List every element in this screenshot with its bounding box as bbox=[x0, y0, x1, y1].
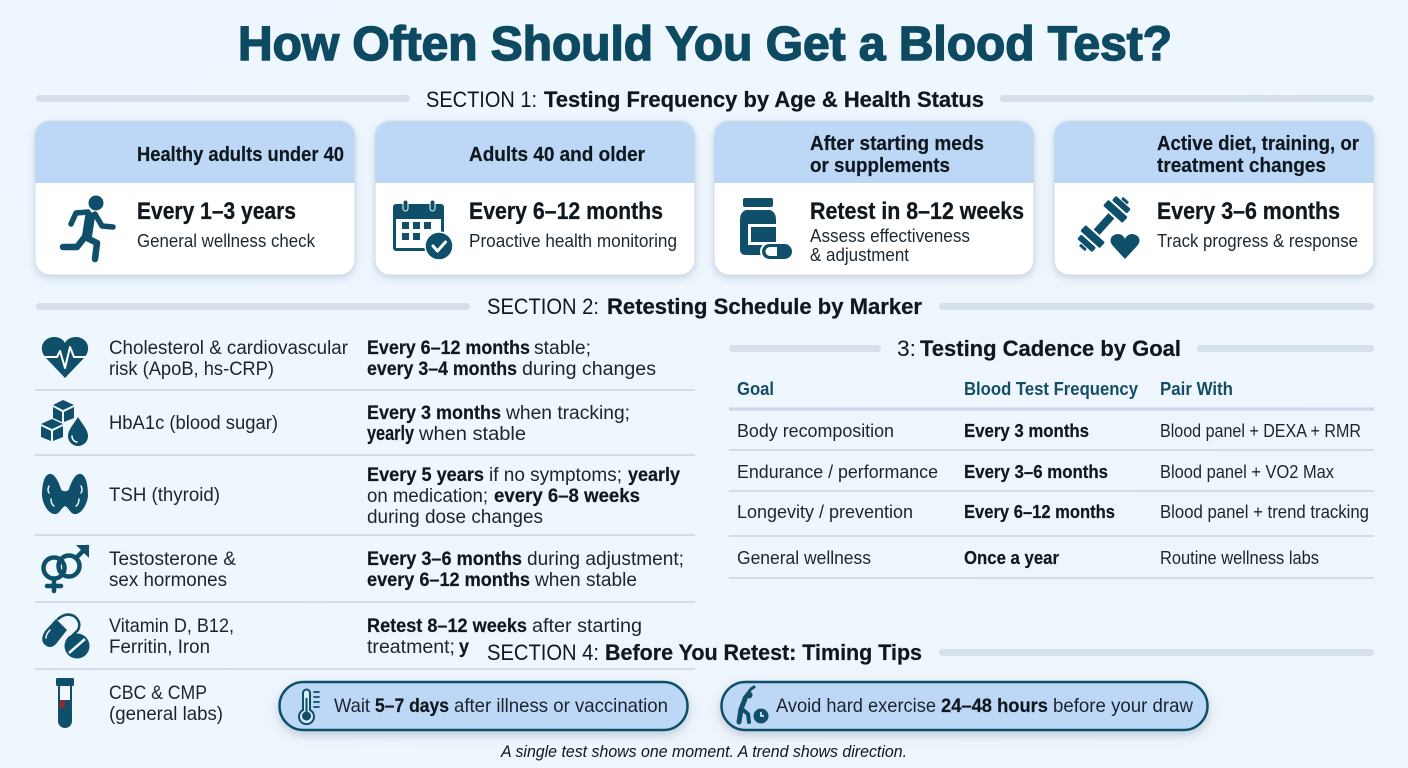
row: HbA1c: yearly bbox=[367, 422, 414, 445]
icon: gender symbols bbox=[44, 545, 89, 591]
row: testosterone: Testosterone & bbox=[109, 549, 236, 570]
table: testing cadence by goal: Routine wellness labs bbox=[1160, 548, 1319, 568]
row: vitamins: Retest 8–12 weeks bbox=[367, 616, 527, 637]
row: HbA1c: HbA1c (blood sugar) bbox=[109, 413, 278, 434]
icon: dumbbell and heart bbox=[1072, 191, 1140, 259]
row: cholesterol: Every 6–12 months bbox=[367, 338, 530, 359]
section 1 heading bbox=[36, 87, 1374, 112]
table: testing cadence by goal: Endurance / performance bbox=[737, 462, 938, 482]
icon: capsule and tablet bbox=[42, 615, 90, 658]
section 2 heading: Retesting Schedule by Marker bbox=[607, 294, 922, 319]
row: vitamins bbox=[42, 615, 642, 658]
table: testing cadence by goal: Once a year bbox=[964, 548, 1059, 568]
row: testosterone: when stable bbox=[534, 570, 637, 591]
table: testing cadence by goal: Every 6–12 months bbox=[964, 502, 1115, 522]
row: cholesterol: risk (ApoB, hs-CRP) bbox=[109, 359, 274, 380]
section 1 heading: SECTION 1: bbox=[426, 87, 537, 112]
panel: active diet, training, or treatment changes: Track progress & response bbox=[1157, 231, 1358, 251]
row: TSH: every 6–8 weeks bbox=[494, 486, 640, 507]
row: TSH: if no symptoms; bbox=[489, 465, 622, 486]
panel: active diet, training, or treatment changes bbox=[1054, 121, 1374, 275]
row: vitamins: y bbox=[459, 637, 469, 658]
icon: blood test tube bbox=[56, 678, 74, 728]
callout: wait after illness: Wait bbox=[334, 695, 371, 717]
panel: adults 40 and older: Proactive health monitoring bbox=[469, 231, 677, 251]
panel: healthy adults under 40: Every 1–3 years bbox=[137, 198, 296, 225]
panel: after starting meds or supplements: or supplements bbox=[810, 154, 950, 177]
panel: healthy adults under 40 bbox=[35, 121, 355, 275]
row: vitamins: Ferritin, Iron bbox=[109, 637, 210, 658]
section 4 heading: Before You Retest: Timing Tips bbox=[605, 640, 922, 665]
icon: thermometer bbox=[299, 690, 319, 724]
panel: healthy adults under 40: General wellness check bbox=[137, 231, 316, 251]
icon: calendar with check bbox=[393, 200, 453, 260]
section 2 heading bbox=[36, 294, 1374, 319]
icon: stretching person with clock bbox=[739, 687, 768, 724]
row: testosterone: every 6–12 months bbox=[367, 570, 530, 591]
panel: active diet, training, or treatment changes: Every 3–6 months bbox=[1157, 198, 1340, 225]
row: cholesterol: stable; bbox=[534, 338, 591, 359]
table: testing cadence by goal: Blood Test Frequency bbox=[964, 379, 1138, 399]
section 4 heading: SECTION 4: bbox=[487, 640, 599, 665]
row: testosterone: Every 3–6 months bbox=[367, 549, 522, 570]
panel: adults 40 and older: Adults 40 and older bbox=[469, 143, 645, 166]
panel: active diet, training, or treatment changes: treatment changes bbox=[1157, 154, 1326, 177]
callout: avoid hard exercise: 24–48 hours bbox=[941, 695, 1048, 717]
table: testing cadence by goal: Blood panel + VO2 Max bbox=[1160, 462, 1334, 482]
row: TSH: Every 5 years bbox=[367, 465, 484, 486]
panel: after starting meds or supplements bbox=[714, 121, 1034, 275]
row: cholesterol: during changes bbox=[522, 359, 656, 380]
row: cholesterol: Cholesterol & cardiovascular bbox=[109, 338, 349, 359]
panel: after starting meds or supplements: & adjustment bbox=[810, 245, 909, 265]
section 3 heading: Testing Cadence by Goal bbox=[920, 336, 1181, 361]
table: testing cadence by goal: Pair With bbox=[1160, 379, 1233, 399]
row: cholesterol bbox=[42, 337, 656, 380]
footer note: A single test shows one moment. A trend shows direction. bbox=[500, 743, 907, 761]
table: testing cadence by goal: Goal bbox=[737, 379, 774, 399]
row: vitamins: Vitamin D, B12, bbox=[109, 616, 234, 637]
row: testosterone bbox=[44, 545, 684, 591]
callout: avoid hard exercise: before your draw bbox=[1053, 695, 1194, 717]
callout: wait after illness bbox=[280, 682, 688, 730]
row: CBC and CMP: (general labs) bbox=[109, 704, 223, 725]
icon: heart with pulse bbox=[42, 337, 88, 378]
icon: sugar cubes and drop bbox=[41, 400, 88, 446]
row: CBC and CMP: CBC & CMP bbox=[109, 683, 207, 704]
row: HbA1c: Every 3 months bbox=[367, 403, 501, 424]
section 4 heading bbox=[480, 638, 1374, 668]
icon: pill bottle and capsule bbox=[740, 198, 793, 260]
row: TSH bbox=[42, 465, 680, 528]
row: vitamins: treatment; bbox=[367, 637, 455, 658]
row: testosterone: during adjustment; bbox=[527, 549, 684, 570]
row: cholesterol: every 3–4 months bbox=[367, 359, 517, 380]
row: TSH: during dose changes bbox=[367, 507, 543, 528]
callout: wait after illness: 5–7 days bbox=[375, 695, 449, 717]
panel: after starting meds or supplements: Retest in 8–12 weeks bbox=[810, 198, 1024, 225]
section 3 heading: 3: bbox=[897, 336, 916, 361]
panel: adults 40 and older bbox=[375, 121, 695, 275]
row: HbA1c: when stable bbox=[418, 424, 526, 445]
table: testing cadence by goal: Blood panel + trend tracking bbox=[1160, 502, 1369, 522]
section 3 heading bbox=[729, 336, 1374, 361]
table: testing cadence by goal: Blood panel + DEXA + RMR bbox=[1160, 421, 1361, 441]
callout: avoid hard exercise: Avoid hard exercise bbox=[776, 695, 936, 717]
row: TSH: TSH (thyroid) bbox=[109, 485, 220, 506]
table: testing cadence by goal: General wellness bbox=[737, 548, 871, 568]
row: HbA1c: when tracking; bbox=[505, 403, 630, 424]
table: testing cadence by goal: Every 3–6 months bbox=[964, 462, 1108, 482]
icon: runner bbox=[63, 196, 113, 259]
table: testing cadence by goal: Every 3 months bbox=[964, 421, 1089, 441]
callout: wait after illness: after illness or vaccination bbox=[454, 695, 668, 717]
panel: active diet, training, or treatment changes: Active diet, training, or bbox=[1157, 132, 1359, 155]
row: vitamins: after starting bbox=[532, 616, 642, 637]
row: TSH: yearly bbox=[628, 465, 680, 486]
table: testing cadence by goal bbox=[729, 379, 1374, 578]
panel: adults 40 and older: Every 6–12 months bbox=[469, 198, 663, 225]
table: testing cadence by goal: Body recomposition bbox=[737, 421, 894, 441]
row: testosterone: sex hormones bbox=[109, 570, 227, 591]
section 2 heading: SECTION 2: bbox=[487, 294, 599, 319]
callout: avoid hard exercise bbox=[722, 682, 1208, 730]
section 1 heading: Testing Frequency by Age & Health Status bbox=[544, 87, 984, 112]
panel: healthy adults under 40: Healthy adults under 40 bbox=[137, 143, 344, 166]
title: How Often Should You Get a Blood Test? bbox=[238, 18, 1172, 71]
panel: after starting meds or supplements: Assess effectiveness bbox=[810, 226, 970, 246]
row: CBC and CMP bbox=[56, 678, 223, 728]
row: HbA1c bbox=[41, 400, 630, 446]
panel: marker schedule bbox=[35, 337, 695, 728]
table: testing cadence by goal: Longevity / prevention bbox=[737, 502, 913, 522]
panel: after starting meds or supplements: After starting meds bbox=[810, 132, 984, 155]
row: TSH: on medication; bbox=[367, 486, 488, 507]
icon: thyroid bbox=[42, 474, 88, 514]
